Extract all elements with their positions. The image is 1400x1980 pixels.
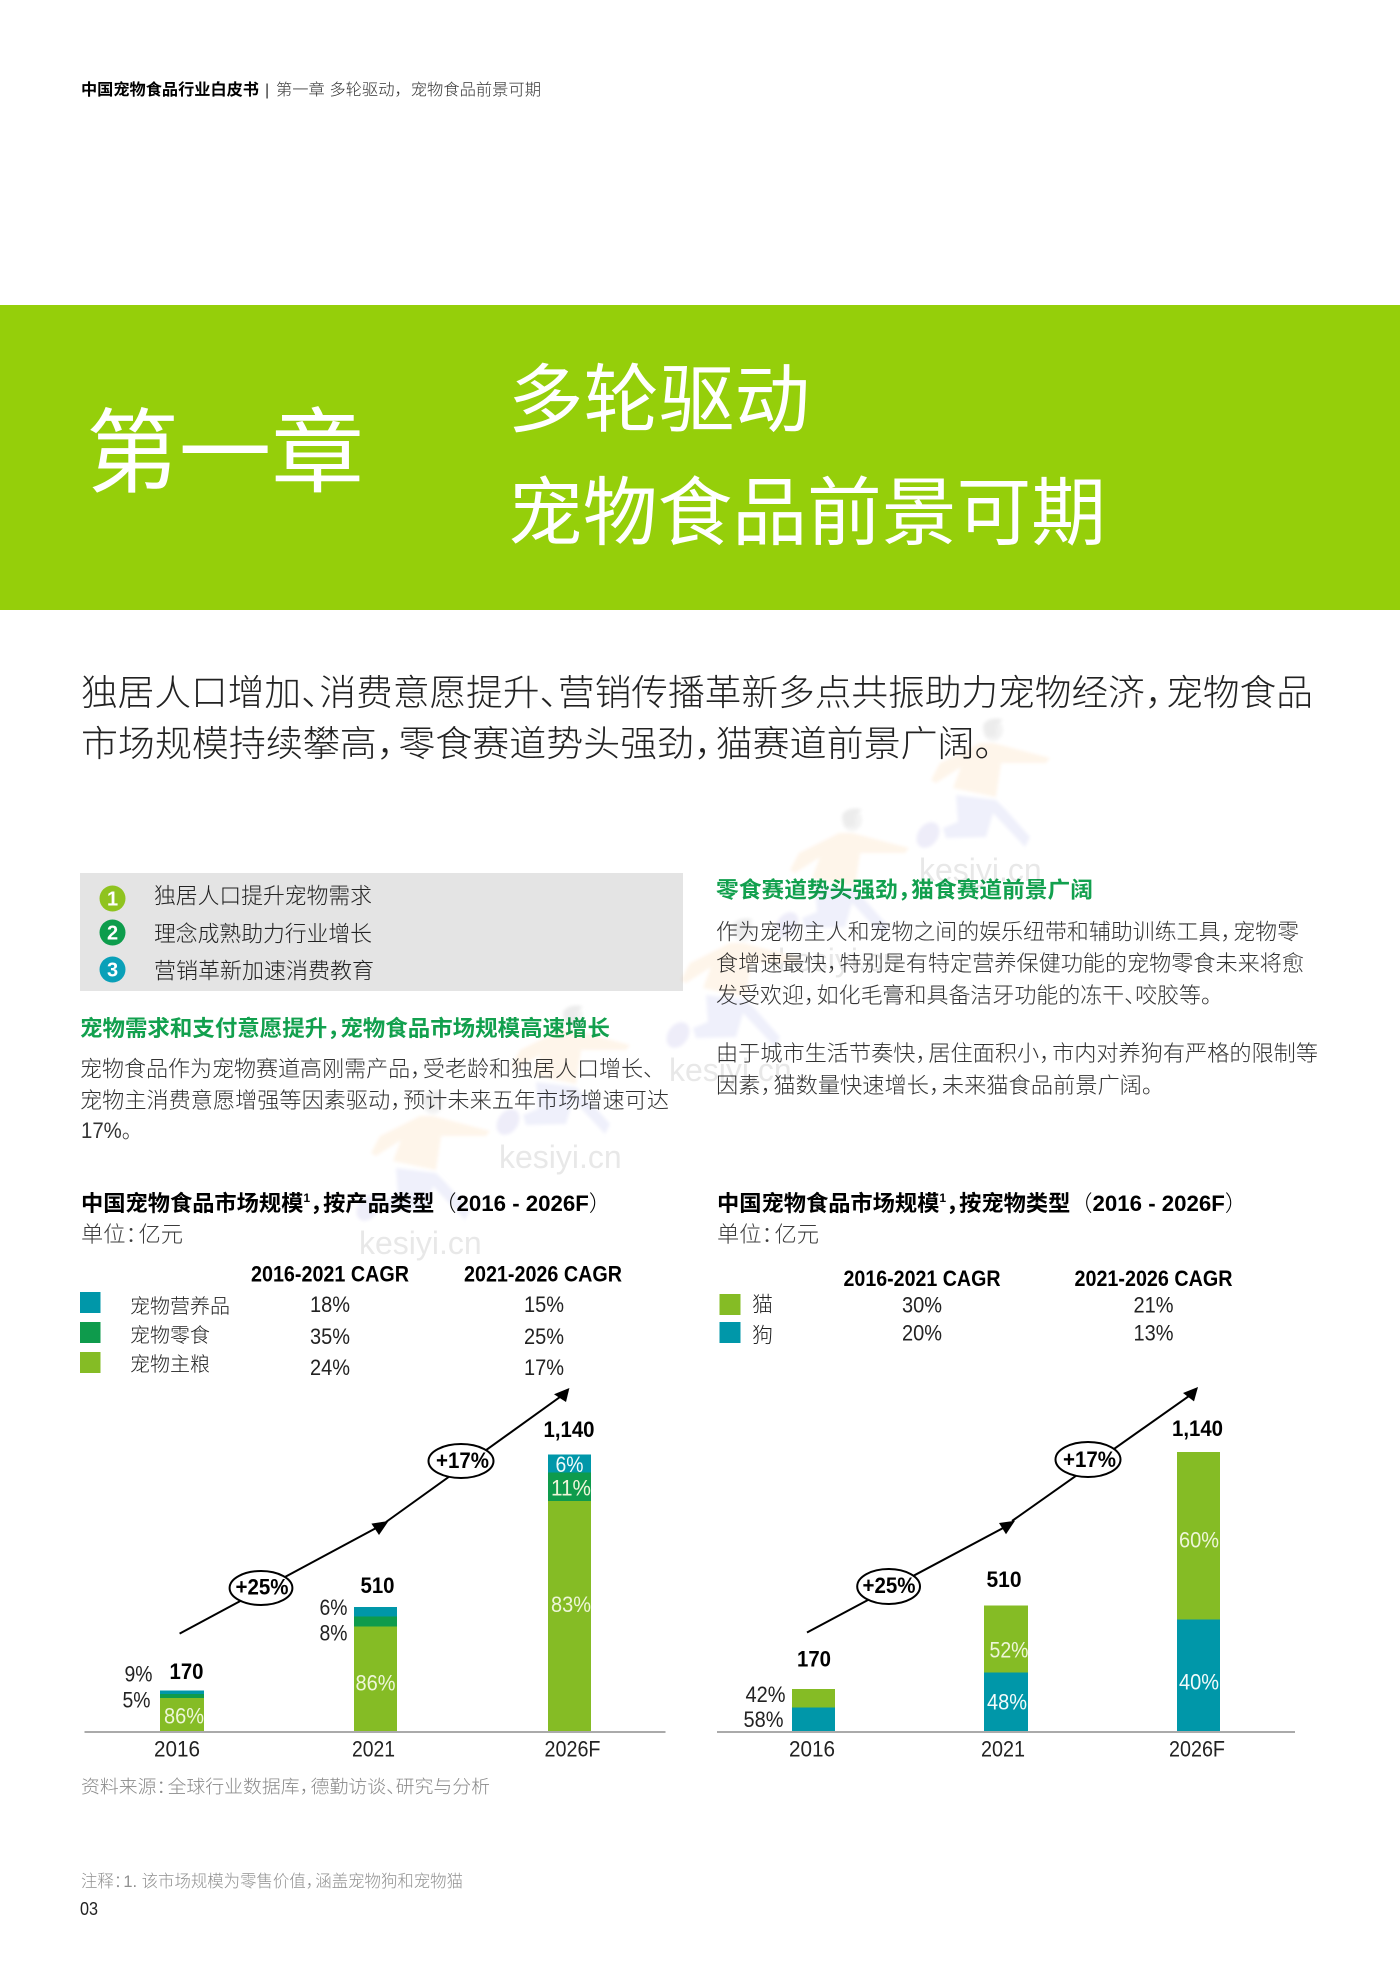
icon: number 1: [100, 886, 126, 912]
chart 2 legend and CAGR table: 2021-2026 CAGR: [1074, 1266, 1233, 1291]
bar 2026F: 1,140: [544, 1417, 594, 1442]
chart 1 legend and CAGR table: 2016-2021 CAGR: [251, 1262, 409, 1286]
chart 2 unit: 单位： 亿元: [717, 1222, 819, 1247]
axis labels: [154, 1736, 600, 1762]
chart 2 legend and CAGR table: 猫: [752, 1294, 773, 1316]
header breadcrumb: [81, 80, 541, 99]
chart 1 legend and CAGR table: 宠物营养品: [130, 1295, 230, 1318]
bar 2021: 52%: [990, 1638, 1028, 1662]
lead paragraph: [81, 672, 1313, 764]
chart 1 title: 1: [303, 1191, 310, 1205]
chart 1 title: [81, 1191, 600, 1247]
lead paragraph: 市场规模持续攀高， 零食赛道势头强劲， 猫赛道前景广阔。: [81, 723, 993, 764]
bar 2026F: 40%: [1179, 1670, 1219, 1694]
chart 1 legend and CAGR table: [80, 1262, 622, 1380]
growth arrows: +17%: [436, 1448, 489, 1473]
right body text: 因素， 猫数量快速增长， 未来猫食品前景广阔。: [716, 1073, 1153, 1098]
driver 3: 营销革新加速消费教育: [154, 958, 374, 984]
bar 2021: 510: [986, 1567, 1022, 1592]
chart 1 legend and CAGR table: 24%: [310, 1355, 350, 1380]
header breadcrumb: |: [265, 82, 269, 99]
bar 2026F: 83%: [551, 1592, 591, 1617]
driver 1: 独居人口提升宠物需求: [154, 884, 372, 908]
right body text: [716, 920, 1318, 1098]
bar 2021: 86%: [356, 1670, 396, 1696]
banner title: 宠物食品前景可期: [508, 471, 1106, 555]
chart 1 legend and CAGR table: 18%: [310, 1292, 350, 1317]
growth arrows: +17%: [1063, 1447, 1116, 1472]
chart 1 legend and CAGR table: 宠物主粮: [130, 1353, 210, 1376]
chapter banner: [0, 305, 1400, 610]
bar 2016: 5%: [122, 1688, 150, 1712]
chart 2 title: 中国宠物食品市场规模: [717, 1191, 937, 1216]
axis labels: 2016: [789, 1736, 835, 1762]
bar 2026F: 1,140: [1172, 1416, 1223, 1441]
chart 1: stacked bars by product type: [84, 1388, 666, 1762]
chart 2 legend and CAGR table: 30%: [902, 1292, 942, 1318]
footnote: 注释： 1. 该市场规模为零售价值， 涵盖宠物狗和宠物猫: [81, 1872, 463, 1891]
right heading: 零食赛道势头强劲， 猫食赛道前景广阔: [716, 878, 1093, 902]
chart 2 legend and CAGR table: [720, 1266, 1233, 1348]
left body text: 宠物食品作为宠物赛道高刚需产品， 受老龄和独居人口增长、: [80, 1056, 654, 1082]
watermark D: kesiyi.cn: [669, 1052, 792, 1088]
panel: key drivers list: [80, 873, 683, 991]
bar 2021: 48%: [987, 1690, 1027, 1714]
bar 2026F: 6%: [556, 1452, 584, 1477]
chart 2 legend and CAGR table: 20%: [902, 1320, 942, 1346]
axis labels: 2026F: [544, 1736, 600, 1762]
bar 2016: [744, 1646, 835, 1732]
page number: 03: [80, 1899, 98, 1919]
chart 2 legend and CAGR table: 2016-2021 CAGR: [844, 1266, 1001, 1291]
bar 2016: 42%: [746, 1682, 786, 1707]
watermark E: [352, 1091, 490, 1261]
chart 1 unit: 单位： 亿元: [81, 1222, 183, 1247]
bar 2016: 170: [170, 1659, 204, 1684]
icon: number 1: 1: [107, 888, 118, 910]
bar 2021: [984, 1567, 1028, 1732]
watermark E: kesiyi.cn: [359, 1225, 482, 1261]
right body text: 作为宠物主人和宠物之间的娱乐纽带和辅助训练工具， 宠物零: [716, 920, 1299, 944]
source line: 资料来源： 全球行业数据库， 德勤访谈、研究与分析: [81, 1777, 490, 1797]
axis labels: 2021: [352, 1736, 395, 1762]
growth arrows: +25%: [862, 1573, 916, 1598]
chart 2 legend and CAGR table: 21%: [1134, 1292, 1174, 1318]
chart 2 title: [717, 1191, 1236, 1247]
growth arrows: [807, 1387, 1198, 1632]
chart 1 legend and CAGR table: 35%: [310, 1324, 350, 1349]
watermark D: [662, 918, 800, 1088]
bar 2026F: 60%: [1179, 1528, 1219, 1552]
watermark B: kesiyi.cn: [778, 942, 901, 978]
chart 1 legend and CAGR table: 25%: [524, 1324, 564, 1349]
axis labels: 2026F: [1169, 1736, 1225, 1762]
chart 1 legend and CAGR table: 宠物零食: [130, 1324, 210, 1347]
banner title: 多轮驱动: [508, 358, 810, 442]
watermark B: [771, 808, 909, 978]
banner title: [508, 358, 1106, 555]
chart 1 title: （2016 - 2026F）: [434, 1191, 600, 1216]
chart 2: stacked bars by pet type: [717, 1387, 1295, 1762]
bar 2016: [122, 1659, 204, 1732]
axis labels: [789, 1736, 1225, 1762]
chart 1 title: 中国宠物食品市场规模: [81, 1191, 301, 1216]
right body text: 由于城市生活节奏快， 居住面积小， 市内对养狗有严格的限制等: [716, 1041, 1318, 1066]
chart 1 legend and CAGR table: 17%: [524, 1355, 564, 1380]
left body text: [80, 1056, 669, 1143]
chart 2 title: ， 按宠物类型: [946, 1191, 1070, 1216]
bar 2016: 86%: [164, 1704, 204, 1728]
watermark C: kesiyi.cn: [499, 1139, 622, 1175]
bar 2016: 58%: [744, 1707, 784, 1732]
bar 2026F: [1172, 1416, 1223, 1732]
left heading: 宠物需求和支付意愿提升， 宠物食品市场规模高速增长: [80, 1016, 610, 1041]
bar 2021: 6%: [320, 1595, 348, 1620]
chart 2 legend and CAGR table: 13%: [1134, 1320, 1174, 1346]
watermark A: [912, 718, 1050, 888]
left body text: 宠物主消费意愿增强等因素驱动， 预计未来五年市场增速可达: [80, 1088, 669, 1113]
driver 2: 理念成熟助力行业增长: [154, 922, 372, 946]
icon: number 2: [100, 920, 126, 946]
chart 1 legend and CAGR table: 15%: [524, 1292, 564, 1317]
watermarks: [352, 718, 1050, 1261]
bar 2021: 8%: [320, 1620, 348, 1646]
icon: number 2: 2: [107, 922, 118, 944]
chart 1 title: ， 按产品类型: [310, 1191, 434, 1216]
growth arrows: +25%: [236, 1574, 288, 1600]
icon: number 3: [100, 956, 126, 982]
watermark C: [492, 1005, 630, 1175]
chart 2 legend and CAGR table: 狗: [752, 1324, 773, 1348]
bar 2016: 170: [797, 1646, 831, 1672]
left body text: 17%。: [81, 1118, 132, 1143]
bar 2026F: 11%: [551, 1476, 591, 1500]
header breadcrumb: 第一章 多轮驱动，宠物食品前景可期: [276, 81, 541, 99]
chart 2 title: 1: [939, 1191, 946, 1205]
bar 2016: 9%: [124, 1662, 152, 1686]
growth arrows: [180, 1388, 569, 1634]
chapter label: 第一章: [86, 403, 364, 505]
header breadcrumb: 中国宠物食品行业白皮书: [81, 80, 259, 99]
axis labels: 2016: [154, 1736, 200, 1762]
right body text: 食增速最快， 特别是有特定营养保健功能的宠物零食未来将愈: [716, 951, 1304, 976]
icon: number 3: 3: [107, 960, 118, 982]
bar 2021: 510: [360, 1573, 394, 1598]
chart 1 legend and CAGR table: 2021-2026 CAGR: [464, 1262, 622, 1286]
chart 2 title: （2016 - 2026F）: [1070, 1191, 1236, 1216]
watermark A: kesiyi.cn: [919, 852, 1042, 888]
axis labels: 2021: [981, 1736, 1025, 1762]
lead paragraph: 独居人口增加、消费意愿提升、营销传播革新多点共振助力宠物经济， 宠物食品: [81, 672, 1313, 713]
bar 2021: [320, 1573, 397, 1732]
right body text: 发受欢迎， 如化毛膏和具备洁牙功能的冻干、咬胶等。: [716, 983, 1212, 1008]
bar 2026F: [544, 1417, 594, 1732]
